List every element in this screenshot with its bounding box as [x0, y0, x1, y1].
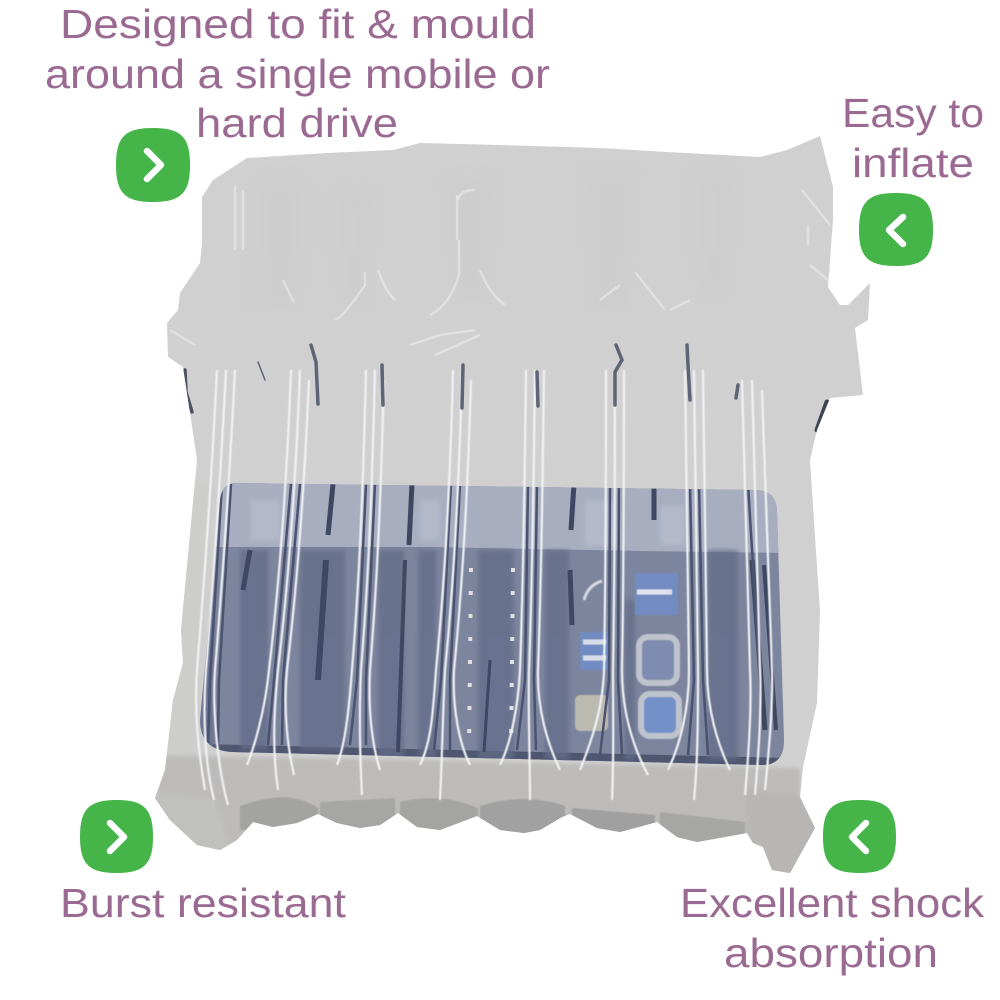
icon: bottom-left green arrow [80, 800, 153, 873]
bottom tube ends [240, 797, 745, 842]
icon: top-right green arrow [859, 193, 933, 266]
phone dark edge [209, 744, 780, 765]
callout: fit and mould: Designed to fit & mould [60, 1, 536, 47]
top fold shading [260, 170, 730, 310]
phone screen seams [243, 484, 654, 752]
product photo: air column bag with phone inside [140, 130, 880, 890]
lower bag zone [155, 755, 801, 873]
phone inside bag [190, 480, 790, 770]
callout: easy to inflate [842, 90, 984, 186]
lower tone stripes [200, 550, 738, 760]
callout: fit and mould: hard drive [196, 100, 398, 146]
dark side bands [752, 560, 776, 730]
icon: bottom-right green arrow [823, 800, 896, 873]
callout: easy to inflate: inflate [852, 140, 974, 186]
light patches in upper band [250, 500, 685, 546]
indicator dots [469, 568, 513, 752]
callout: burst resistant: Burst resistant [60, 880, 347, 926]
bag body [140, 130, 880, 890]
callout: fit and mould: around a single mobile or [45, 51, 550, 97]
callout: fit and mould [45, 1, 550, 146]
callout: shock absorption [680, 880, 985, 976]
dark lines between highlights [208, 484, 760, 755]
tube highlights [196, 370, 772, 805]
callout: shock absorption: absorption [724, 930, 938, 976]
top bag crease highlights [170, 185, 830, 355]
icon: top-left green arrow [116, 128, 190, 202]
side margins of the bag [166, 482, 195, 756]
callout: easy to inflate: Easy to [842, 90, 984, 136]
bottom corners [155, 794, 228, 850]
app icons [575, 573, 679, 736]
callout: shock absorption: Excellent shock [680, 880, 985, 926]
dark valve marks [185, 345, 827, 430]
